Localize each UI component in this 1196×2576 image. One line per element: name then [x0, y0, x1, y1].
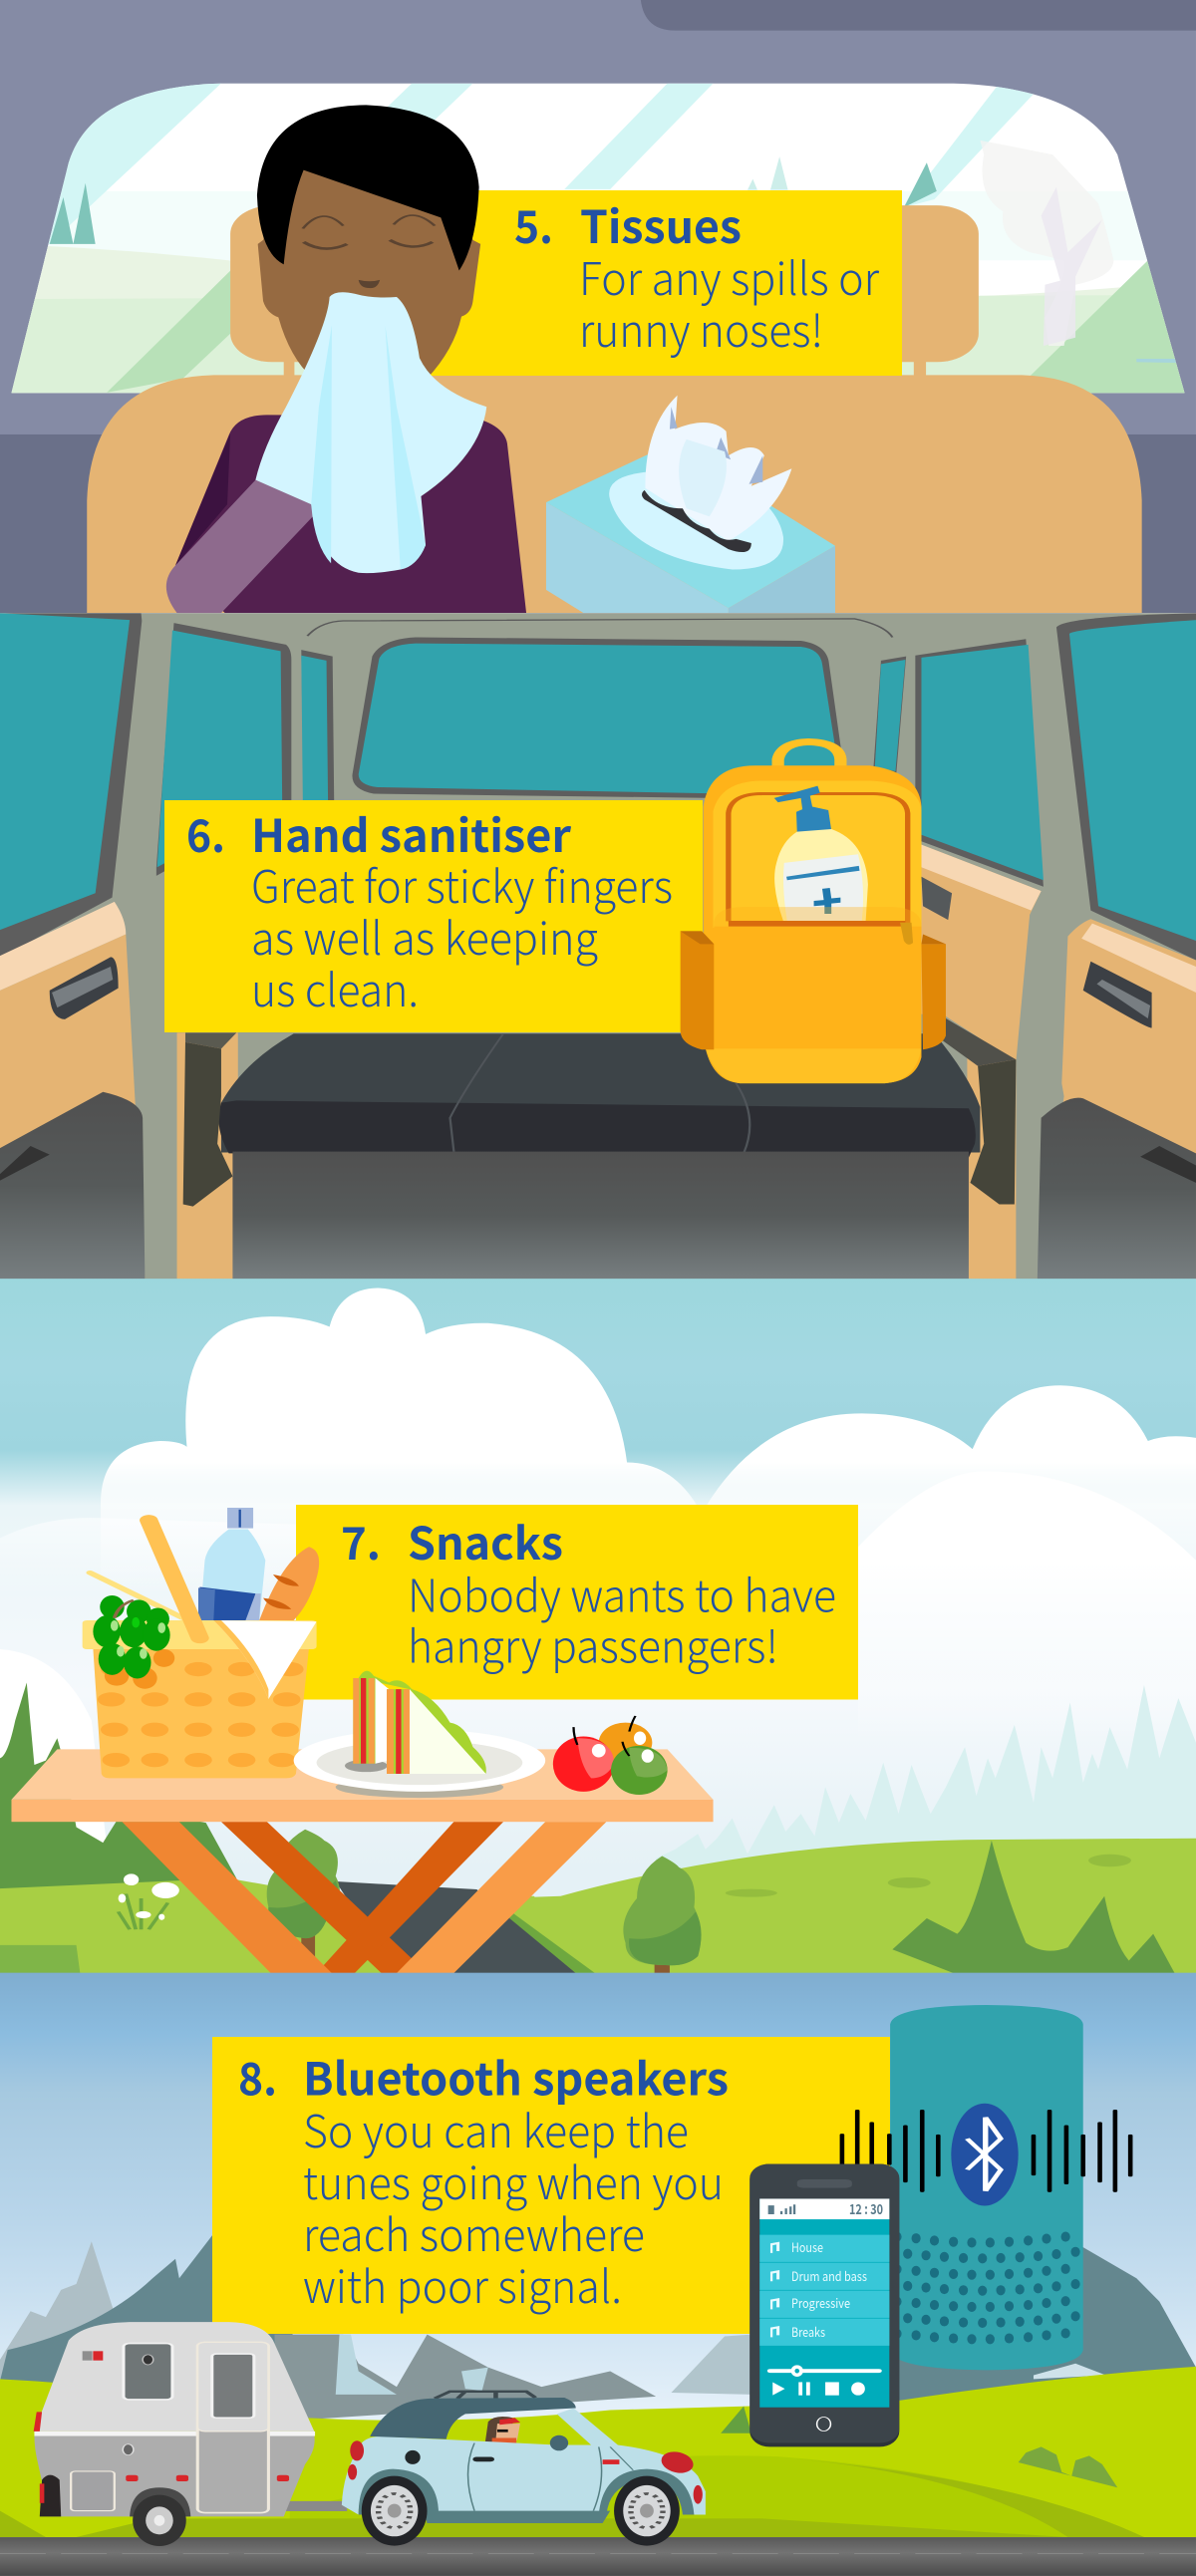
panel: 8 bluetooth speakers — [0, 1973, 1196, 2576]
distant pine trees — [656, 1685, 1196, 1868]
table top — [11, 1749, 714, 1822]
panel: 5 tissues — [0, 0, 1196, 638]
flowers — [119, 1873, 179, 1929]
tree: left — [267, 1830, 340, 1960]
road — [336, 1881, 576, 1973]
callout: hand sanitiser text box — [164, 800, 703, 1032]
playlist labels — [791, 2237, 867, 2341]
number and heading: 8. — [238, 2043, 277, 2109]
body text: So you can keep the — [303, 2096, 689, 2160]
callout: tissues text box — [429, 190, 902, 376]
body text: hangry passengers! — [408, 1610, 778, 1676]
person blowing nose — [166, 105, 526, 613]
body text: Nobody wants to have — [408, 1561, 836, 1624]
picnic basket — [83, 1508, 319, 1778]
bushes — [1019, 2446, 1117, 2487]
panel: 6 hand sanitiser — [0, 613, 1196, 1280]
panel: 7 snacks — [0, 1276, 1196, 1974]
number and heading: Bluetooth speakers — [303, 2043, 729, 2109]
body text — [303, 2096, 724, 2316]
body text — [579, 243, 880, 360]
icon: tissue box — [546, 396, 835, 613]
scene: sky, clouds, hills — [0, 1276, 1196, 1974]
number and heading: Snacks — [408, 1508, 563, 1573]
picnic table with food — [11, 1508, 714, 1973]
icon: bluetooth speaker — [842, 2005, 1130, 2370]
body text: runny noses! — [579, 295, 823, 360]
body text: us clean. — [251, 955, 419, 1019]
scene: car rear window and seat — [0, 0, 1196, 638]
caravan — [34, 2322, 347, 2546]
scene: van interior — [0, 613, 1196, 1280]
number and heading: Hand sanitiser — [251, 800, 571, 865]
sound wave bars — [842, 2111, 1130, 2191]
body text: For any spills or — [579, 243, 880, 308]
tree: right — [623, 1857, 702, 1974]
icon: smartphone with playlist — [749, 2163, 899, 2446]
table legs — [122, 1822, 606, 1973]
plate with sandwich — [294, 1671, 545, 1798]
callout: bluetooth speakers text box — [212, 2037, 890, 2334]
grapes — [93, 1595, 174, 1689]
fruit — [553, 1716, 668, 1795]
playlist labels: Breaks — [791, 2322, 825, 2341]
number and heading: Tissues — [580, 191, 742, 256]
road — [0, 2537, 1196, 2576]
body text — [408, 1561, 836, 1676]
sanitiser bottle — [774, 786, 868, 921]
body text: with poor signal. — [303, 2251, 622, 2316]
playlist labels: Drum and bass — [791, 2266, 867, 2285]
number and heading: 7. — [341, 1508, 381, 1573]
body text: Great for sticky fingers — [251, 851, 673, 916]
callout: snacks text box — [296, 1505, 858, 1700]
scene: mountains and hills — [0, 1973, 1196, 2576]
number and heading — [341, 1508, 563, 1573]
playlist labels: House — [791, 2237, 823, 2256]
body text: as well as keeping — [251, 903, 598, 968]
playlist labels: Progressive — [791, 2293, 850, 2312]
icon: backpack with sanitiser — [681, 741, 946, 1083]
body text — [251, 851, 673, 1019]
body text: reach somewhere — [303, 2199, 645, 2264]
body text: tunes going when you — [303, 2147, 724, 2212]
wheels — [362, 2476, 680, 2546]
car with driver — [342, 2392, 706, 2546]
number and heading: 5. — [514, 191, 553, 256]
status time: 12 : 30 — [849, 2199, 883, 2219]
driver — [485, 2417, 520, 2443]
number and heading: 6. — [186, 800, 225, 865]
